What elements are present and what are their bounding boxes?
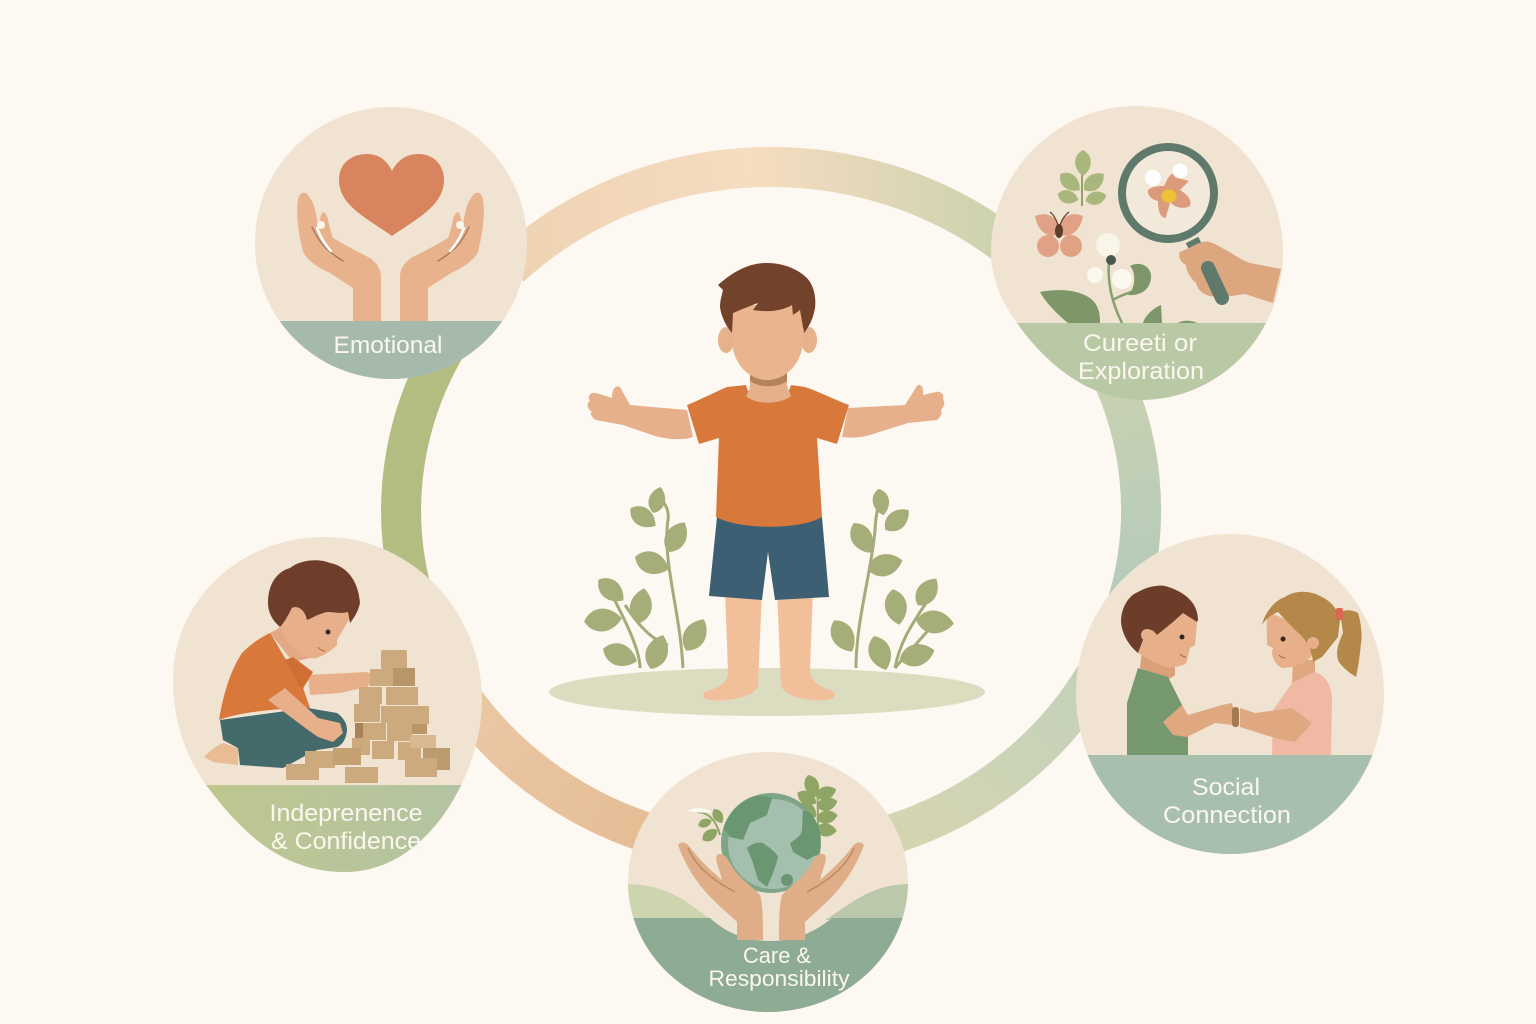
band: social	[1088, 755, 1372, 854]
shirt	[687, 385, 849, 527]
central ring	[401, 167, 1141, 843]
band: independence	[206, 785, 461, 872]
band: emotional	[280, 321, 502, 379]
arms and hands	[588, 385, 944, 439]
head	[718, 263, 817, 403]
right plant	[825, 487, 955, 674]
label: curiosity: Cureeti or	[1083, 330, 1197, 357]
label: social: Social	[1192, 774, 1260, 801]
band: care	[634, 918, 902, 1012]
label: independence: Indeprenence	[270, 800, 422, 827]
central child illustration	[549, 263, 985, 716]
ground ellipse	[549, 668, 985, 716]
band: curiosity	[1017, 323, 1266, 400]
icon: globe in hands	[678, 773, 864, 940]
label: connection: Connection	[1163, 802, 1291, 829]
icon: heart in hands	[297, 154, 484, 321]
left plant	[583, 485, 713, 673]
legs	[703, 590, 835, 700]
label: exploration: Exploration	[1078, 358, 1204, 385]
label: confidence: & Confidence	[271, 828, 421, 855]
label: care: Care &	[743, 943, 811, 968]
icon: child stacking blocks	[204, 560, 450, 783]
panel: curiosity	[990, 106, 1285, 403]
icon: two children holding hands	[1121, 586, 1362, 755]
icon: magnifier and nature	[1035, 147, 1281, 323]
panel: independence	[170, 537, 485, 875]
panel: care	[625, 752, 912, 1018]
panel: social	[1070, 534, 1390, 860]
hills	[625, 884, 910, 920]
label: responsibility: Responsibility	[708, 966, 850, 991]
infographic canvas	[173, 106, 1384, 1012]
label: emotional: Emotional	[334, 332, 442, 359]
shorts	[709, 517, 829, 600]
panel: emotional	[250, 107, 530, 381]
